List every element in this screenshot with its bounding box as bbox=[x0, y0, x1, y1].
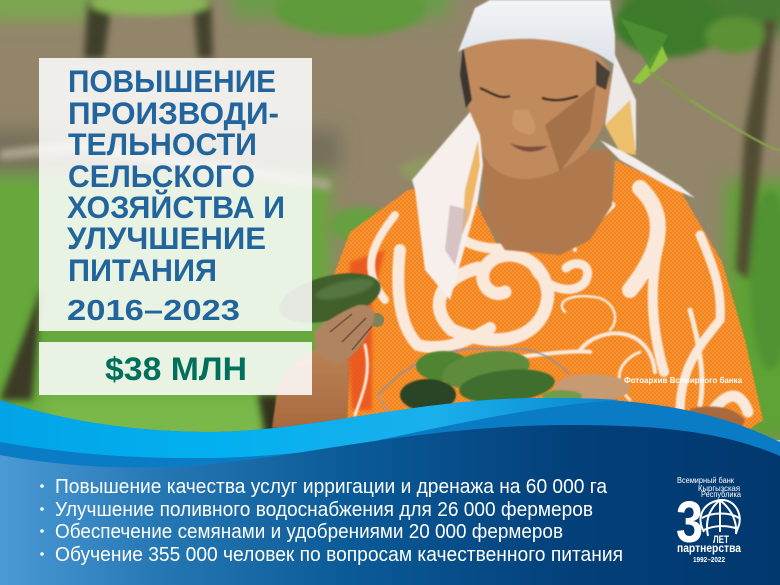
heading: project title: ПОВЫШЕНИЕ bbox=[68, 63, 276, 99]
logo caption bbox=[677, 475, 741, 499]
list: project results bbox=[40, 476, 623, 566]
figure: orange dress bbox=[332, 160, 763, 432]
figure: neck and chest bbox=[482, 150, 612, 255]
photo details: foliage bbox=[620, 18, 780, 150]
logo: numeral 3: 3 bbox=[676, 490, 703, 555]
icon: globe bbox=[701, 500, 740, 536]
heading: project title: ПРОИЗВОДИ- bbox=[68, 95, 279, 131]
result 2: Улучшение поливного водоснабжения для 26 000 фермеров bbox=[55, 499, 593, 521]
figure: white headscarf bbox=[412, 0, 695, 300]
photo: woman farmer holding cucumbers bbox=[0, 0, 780, 445]
logo caption: Всемирный банк bbox=[677, 475, 734, 485]
logo: World Bank 30 years of partnership bbox=[676, 475, 742, 564]
photo background: garden and wall bbox=[0, 0, 780, 445]
panel: budget bbox=[39, 342, 312, 395]
result 3: Обеспечение семянами и удобрениями 20 000 фермеров bbox=[55, 521, 563, 543]
heading: years: 2016–2023 bbox=[67, 295, 240, 327]
logo caption: Кыргызская bbox=[698, 483, 740, 493]
logo: period: 1992–2022 bbox=[693, 555, 725, 564]
heading: project title: ПИТАНИЯ bbox=[68, 252, 217, 288]
budget amount: $38 МЛН bbox=[105, 351, 247, 387]
result 4: Обучение 355 000 человек по вопросам качественного питания bbox=[55, 544, 623, 566]
result 1: Повышение качества услуг ирригации и дренажа на 60 000 га bbox=[55, 476, 608, 498]
figure: held cucumber arm bbox=[272, 320, 380, 428]
figure: face bbox=[460, 39, 610, 179]
logo caption: Республика bbox=[701, 489, 741, 499]
cucumber held in hand bbox=[274, 264, 386, 364]
heading: project title: УЛУЧШЕНИЕ bbox=[67, 220, 266, 256]
wire bowl of cucumbers bbox=[378, 345, 745, 430]
logo: partnership text: партнерства bbox=[677, 543, 742, 555]
logo: years text: ЛЕТ bbox=[713, 534, 729, 546]
heading: project title bbox=[67, 63, 285, 288]
heading: project title: СЕЛЬСКОГО bbox=[68, 158, 255, 194]
panel: title bbox=[39, 58, 312, 331]
heading: project title: ХОЗЯЙСТВА И bbox=[67, 189, 285, 225]
dress pattern: white swirls bbox=[355, 188, 748, 422]
footer: layered blue waves bbox=[0, 398, 780, 585]
photo credit: Фотоархив Всемирного банка bbox=[624, 375, 742, 385]
heading: project title: ТЕЛЬНОСТИ bbox=[68, 126, 257, 162]
